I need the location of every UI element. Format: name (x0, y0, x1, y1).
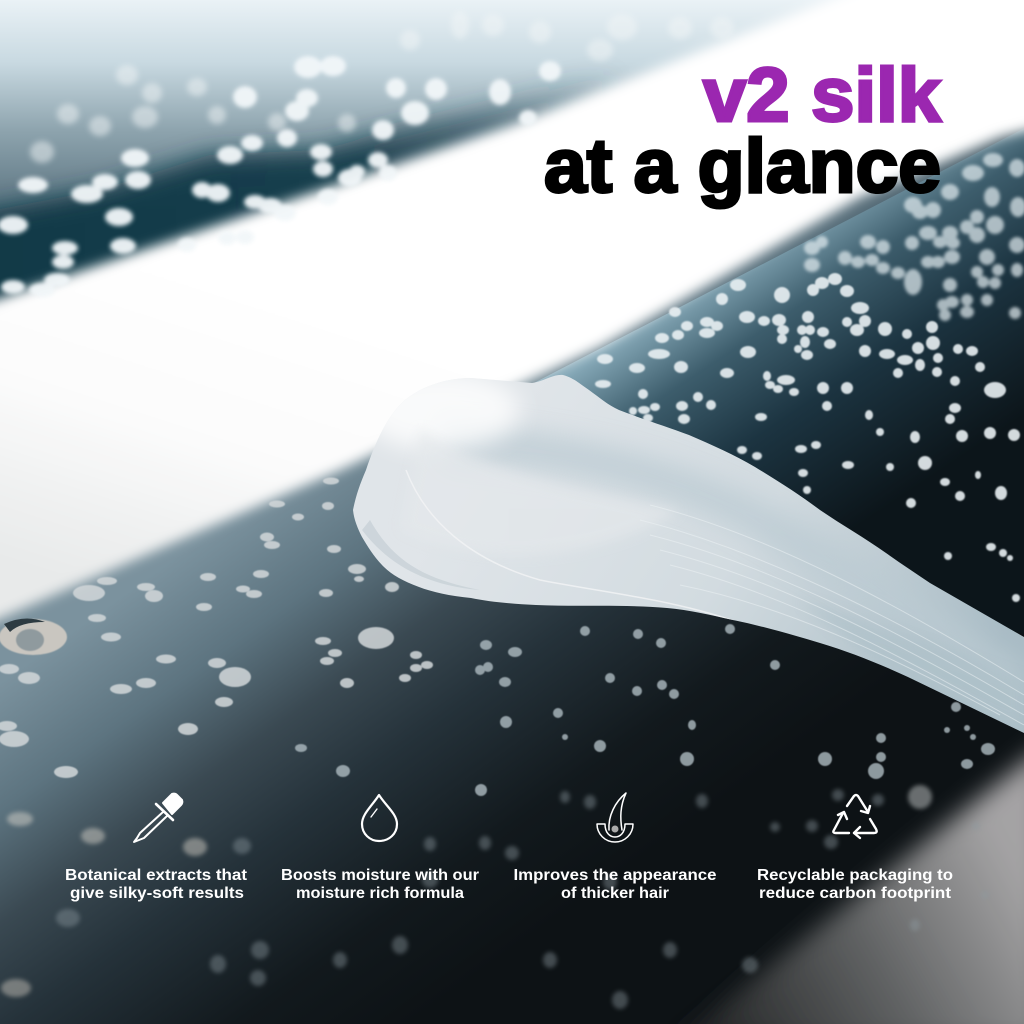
caption: botanical extracts: Botanical extracts that (65, 867, 248, 884)
water droplets: lower left surface (0, 478, 433, 778)
cream smear (353, 370, 1024, 733)
caption: moisture: moisture rich formula (296, 885, 464, 902)
icon: water drop (362, 795, 397, 841)
water droplets: far upper right, soft (804, 153, 1024, 321)
water droplets: lower centre surface (295, 624, 995, 796)
caption: thicker hair: of thicker hair (561, 885, 669, 902)
feature: botanical extracts (65, 794, 248, 902)
large ring droplet at left edge (0, 618, 67, 655)
title (544, 53, 942, 209)
title line: at a glance: at a glance (544, 124, 941, 209)
icon: hair follicle (597, 793, 633, 842)
feature: recyclable packaging (757, 795, 953, 902)
caption: thicker hair: Improves the appearance (514, 867, 717, 884)
feature: moisture (281, 795, 479, 902)
icon: dropper (134, 794, 182, 842)
title line: v2 silk: v2 silk (703, 53, 942, 138)
water droplets: out-of-focus upper left (0, 56, 561, 297)
feature: thicker hair (514, 793, 717, 902)
water droplets: blurred foreground (1, 785, 989, 1009)
caption: recyclable packaging: reduce carbon footprint (759, 885, 952, 902)
caption: recyclable packaging: Recyclable packaging to (757, 867, 953, 884)
water droplets: upper right field (595, 273, 1020, 602)
icon: recycle arrows (833, 795, 877, 838)
caption: moisture: Boosts moisture with our (281, 867, 479, 884)
white light band (0, 0, 1024, 636)
caption: botanical extracts: give silky-soft results (70, 885, 244, 902)
water droplets: faint upper row (30, 11, 734, 163)
